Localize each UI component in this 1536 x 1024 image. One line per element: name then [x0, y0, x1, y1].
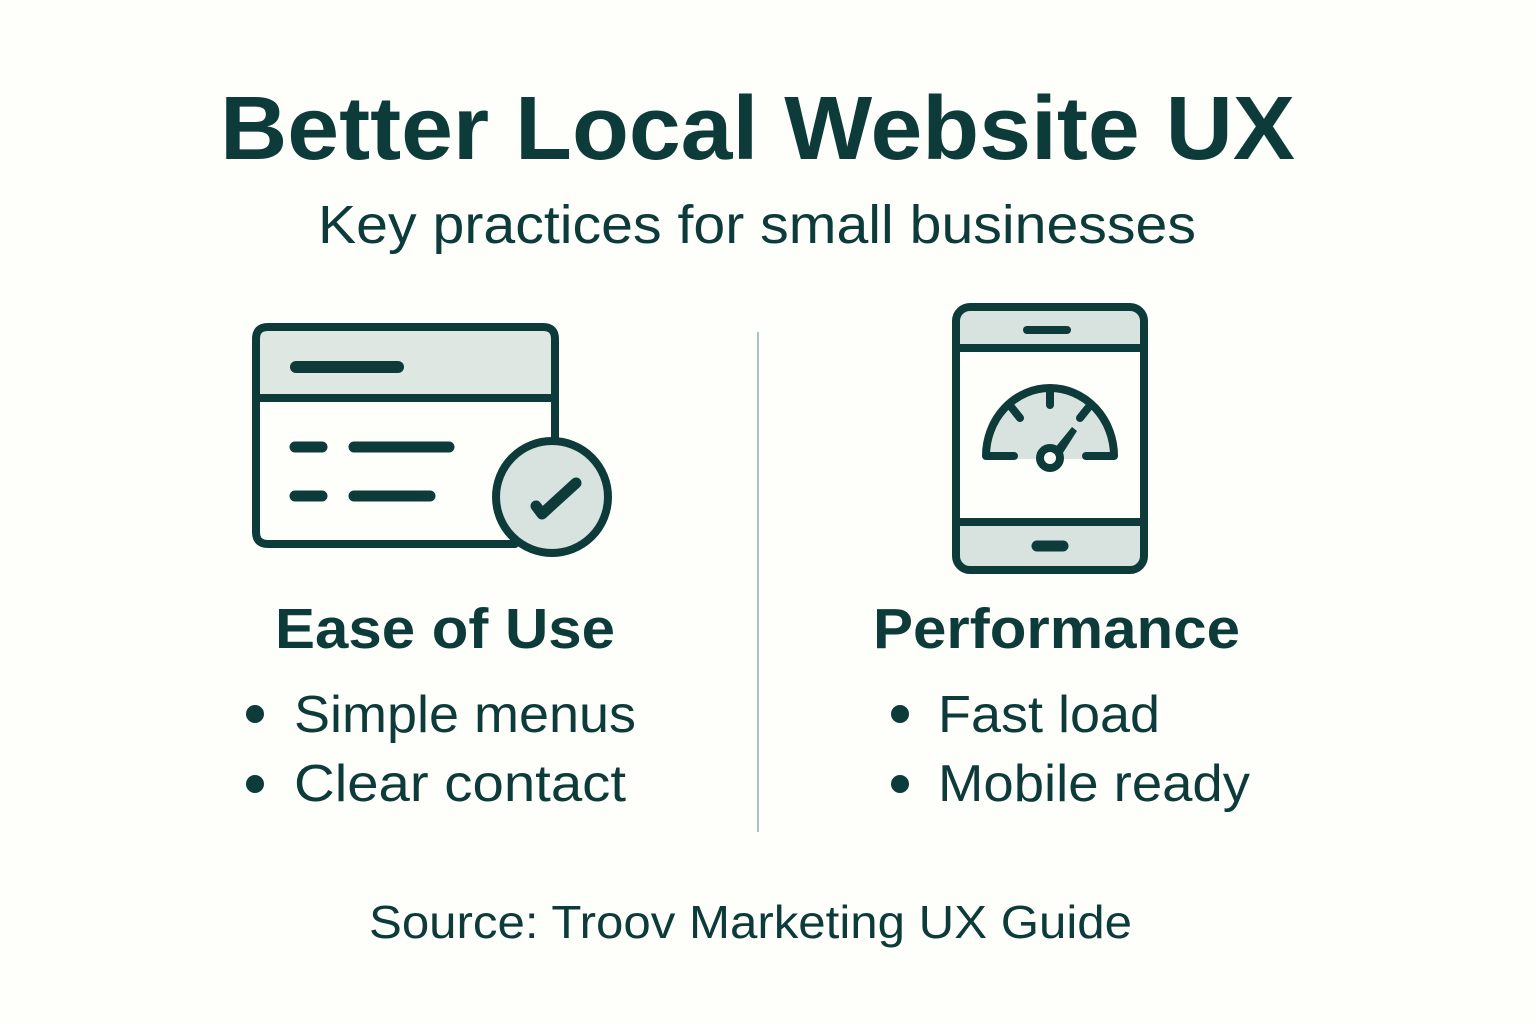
- list: performance items: Fast load: [938, 686, 1160, 744]
- list: ease of use items: Simple menus: [294, 686, 636, 744]
- list: performance items: Mobile ready: [938, 755, 1250, 813]
- subtitle: Key practices for small businesses: [318, 195, 1196, 255]
- icon: website window with checkmark: [256, 327, 608, 553]
- icon: phone with speed gauge: [956, 307, 1144, 570]
- heading: performance: Performance: [873, 597, 1240, 661]
- list: performance items: [891, 686, 1250, 813]
- list: ease of use items: [246, 686, 636, 813]
- list: ease of use items: Clear contact: [294, 755, 627, 813]
- title: Better Local Website UX: [220, 79, 1295, 179]
- source note: Source: Troov Marketing UX Guide: [369, 896, 1132, 948]
- center divider: [757, 332, 759, 832]
- heading: ease of use: Ease of Use: [275, 597, 615, 661]
